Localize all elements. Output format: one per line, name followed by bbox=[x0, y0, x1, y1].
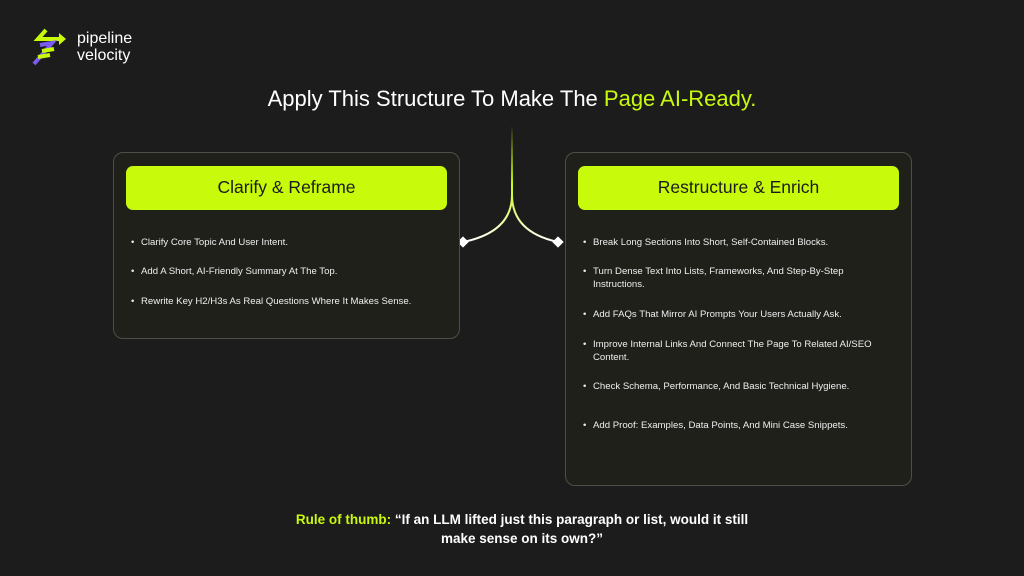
footer: rule of thumb bbox=[296, 512, 748, 546]
connector arrow bbox=[460, 127, 564, 248]
heading bbox=[578, 166, 899, 210]
logo text bbox=[77, 30, 132, 64]
list: Clarify Core Topic And User Intent. bbox=[141, 237, 288, 248]
footer: rule of thumb: Rule of thumb: “If an LLM lifted just this paragraph or list, would it still bbox=[296, 512, 748, 527]
list: Improve Internal Links And Connect The Page To Related AI/SEO Content. bbox=[593, 339, 872, 363]
footer: rule of thumb: make sense on its own?” bbox=[441, 531, 603, 546]
heading: Restructure & Enrich bbox=[658, 177, 819, 197]
panel: restructure & enrich bbox=[565, 152, 912, 486]
list bbox=[131, 237, 411, 307]
title: Apply This Structure To Make The Page AI-Ready. bbox=[268, 86, 756, 111]
panel: clarify & reframe bbox=[113, 152, 460, 339]
heading bbox=[126, 166, 447, 210]
list: Check Schema, Performance, And Basic Technical Hygiene. bbox=[593, 381, 849, 392]
list: Break Long Sections Into Short, Self-Contained Blocks. bbox=[593, 237, 828, 248]
logo text: pipeline bbox=[77, 30, 132, 47]
list: Turn Dense Text Into Lists, Frameworks, And Step-By-Step Instructions. bbox=[593, 266, 844, 290]
heading: Clarify & Reframe bbox=[217, 177, 356, 197]
list: Add FAQs That Mirror AI Prompts Your Users Actually Ask. bbox=[593, 309, 842, 320]
logo bbox=[32, 28, 132, 66]
list: Add A Short, AI-Friendly Summary At The Top. bbox=[141, 266, 337, 277]
icon: logo mark bbox=[32, 28, 66, 66]
logo text: velocity bbox=[77, 47, 130, 64]
list: Rewrite Key H2/H3s As Real Questions Where It Makes Sense. bbox=[141, 296, 411, 307]
list bbox=[583, 237, 872, 431]
list: Add Proof: Examples, Data Points, And Mini Case Snippets. bbox=[593, 420, 848, 431]
